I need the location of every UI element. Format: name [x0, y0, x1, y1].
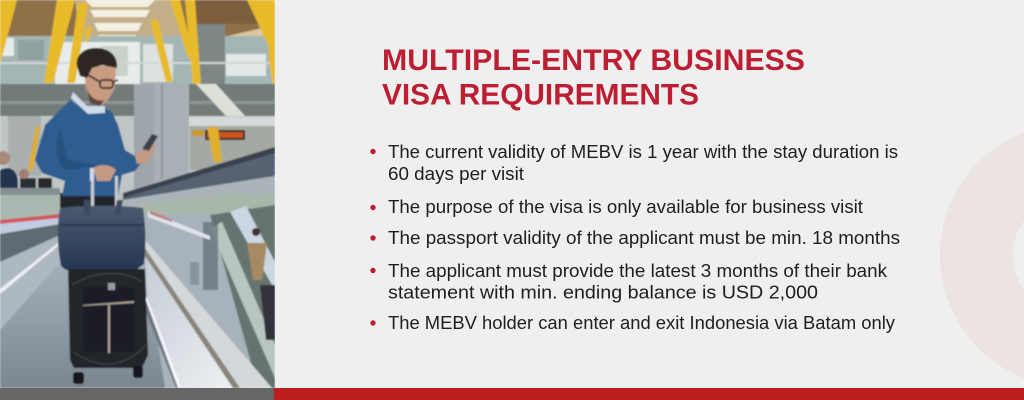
sweater — [35, 100, 143, 196]
moving walkway floor — [0, 262, 165, 388]
photo: businessman with luggage on airport walkway — [0, 0, 275, 388]
glasses — [85, 73, 118, 88]
decorative ring — [976, 160, 1024, 350]
departures sign — [192, 130, 245, 140]
suitcase — [68, 269, 148, 384]
bullet 1 — [370, 142, 898, 184]
bottom bar: red — [274, 388, 1024, 400]
bullet 2: The purpose of the visa is only available for business visit — [388, 197, 863, 217]
requirements list — [370, 142, 900, 333]
title: MULTIPLE-ENTRY BUSINESS — [382, 44, 805, 77]
yellow columns — [0, 0, 275, 85]
suitcase wheels — [73, 372, 84, 384]
bullet 4 — [370, 261, 888, 302]
bullet 3: The passport validity of the applicant must be min. 18 months — [388, 228, 900, 248]
pillars — [134, 84, 154, 189]
upper glass gallery — [0, 24, 275, 84]
walkway side band — [145, 240, 272, 388]
trousers — [60, 193, 116, 212]
bullet 4: The applicant must provide the latest 3 months of their bank — [388, 261, 888, 281]
bullet 1: The current validity of MEBV is 1 year with the stay duration is — [388, 142, 898, 162]
escalator handrail right — [123, 147, 275, 206]
shoulder bag — [58, 200, 145, 270]
hand on handle — [93, 165, 116, 181]
hair — [77, 48, 117, 78]
yellow post — [207, 127, 222, 162]
background people — [0, 151, 52, 192]
dark mezzanine band — [0, 84, 275, 116]
bottom bar: grey — [0, 388, 274, 400]
right glass and escalator — [125, 176, 275, 388]
hand with phone — [135, 143, 156, 164]
bullet 1: 60 days per visit — [388, 164, 524, 184]
bullet 4: statement with min. ending balance is USD 2,000 — [388, 282, 818, 302]
neck and face — [84, 66, 116, 106]
title: VISA REQUIREMENTS — [382, 78, 699, 112]
ceiling — [6, 0, 264, 37]
title — [382, 44, 805, 112]
luggage handle — [91, 176, 118, 208]
left side glass and rail — [0, 188, 60, 330]
man — [35, 48, 158, 212]
bullet 5: The MEBV holder can enter and exit Indonesia via Batam only — [388, 313, 895, 333]
shirt collar — [71, 92, 105, 114]
lower hall — [4, 124, 131, 190]
